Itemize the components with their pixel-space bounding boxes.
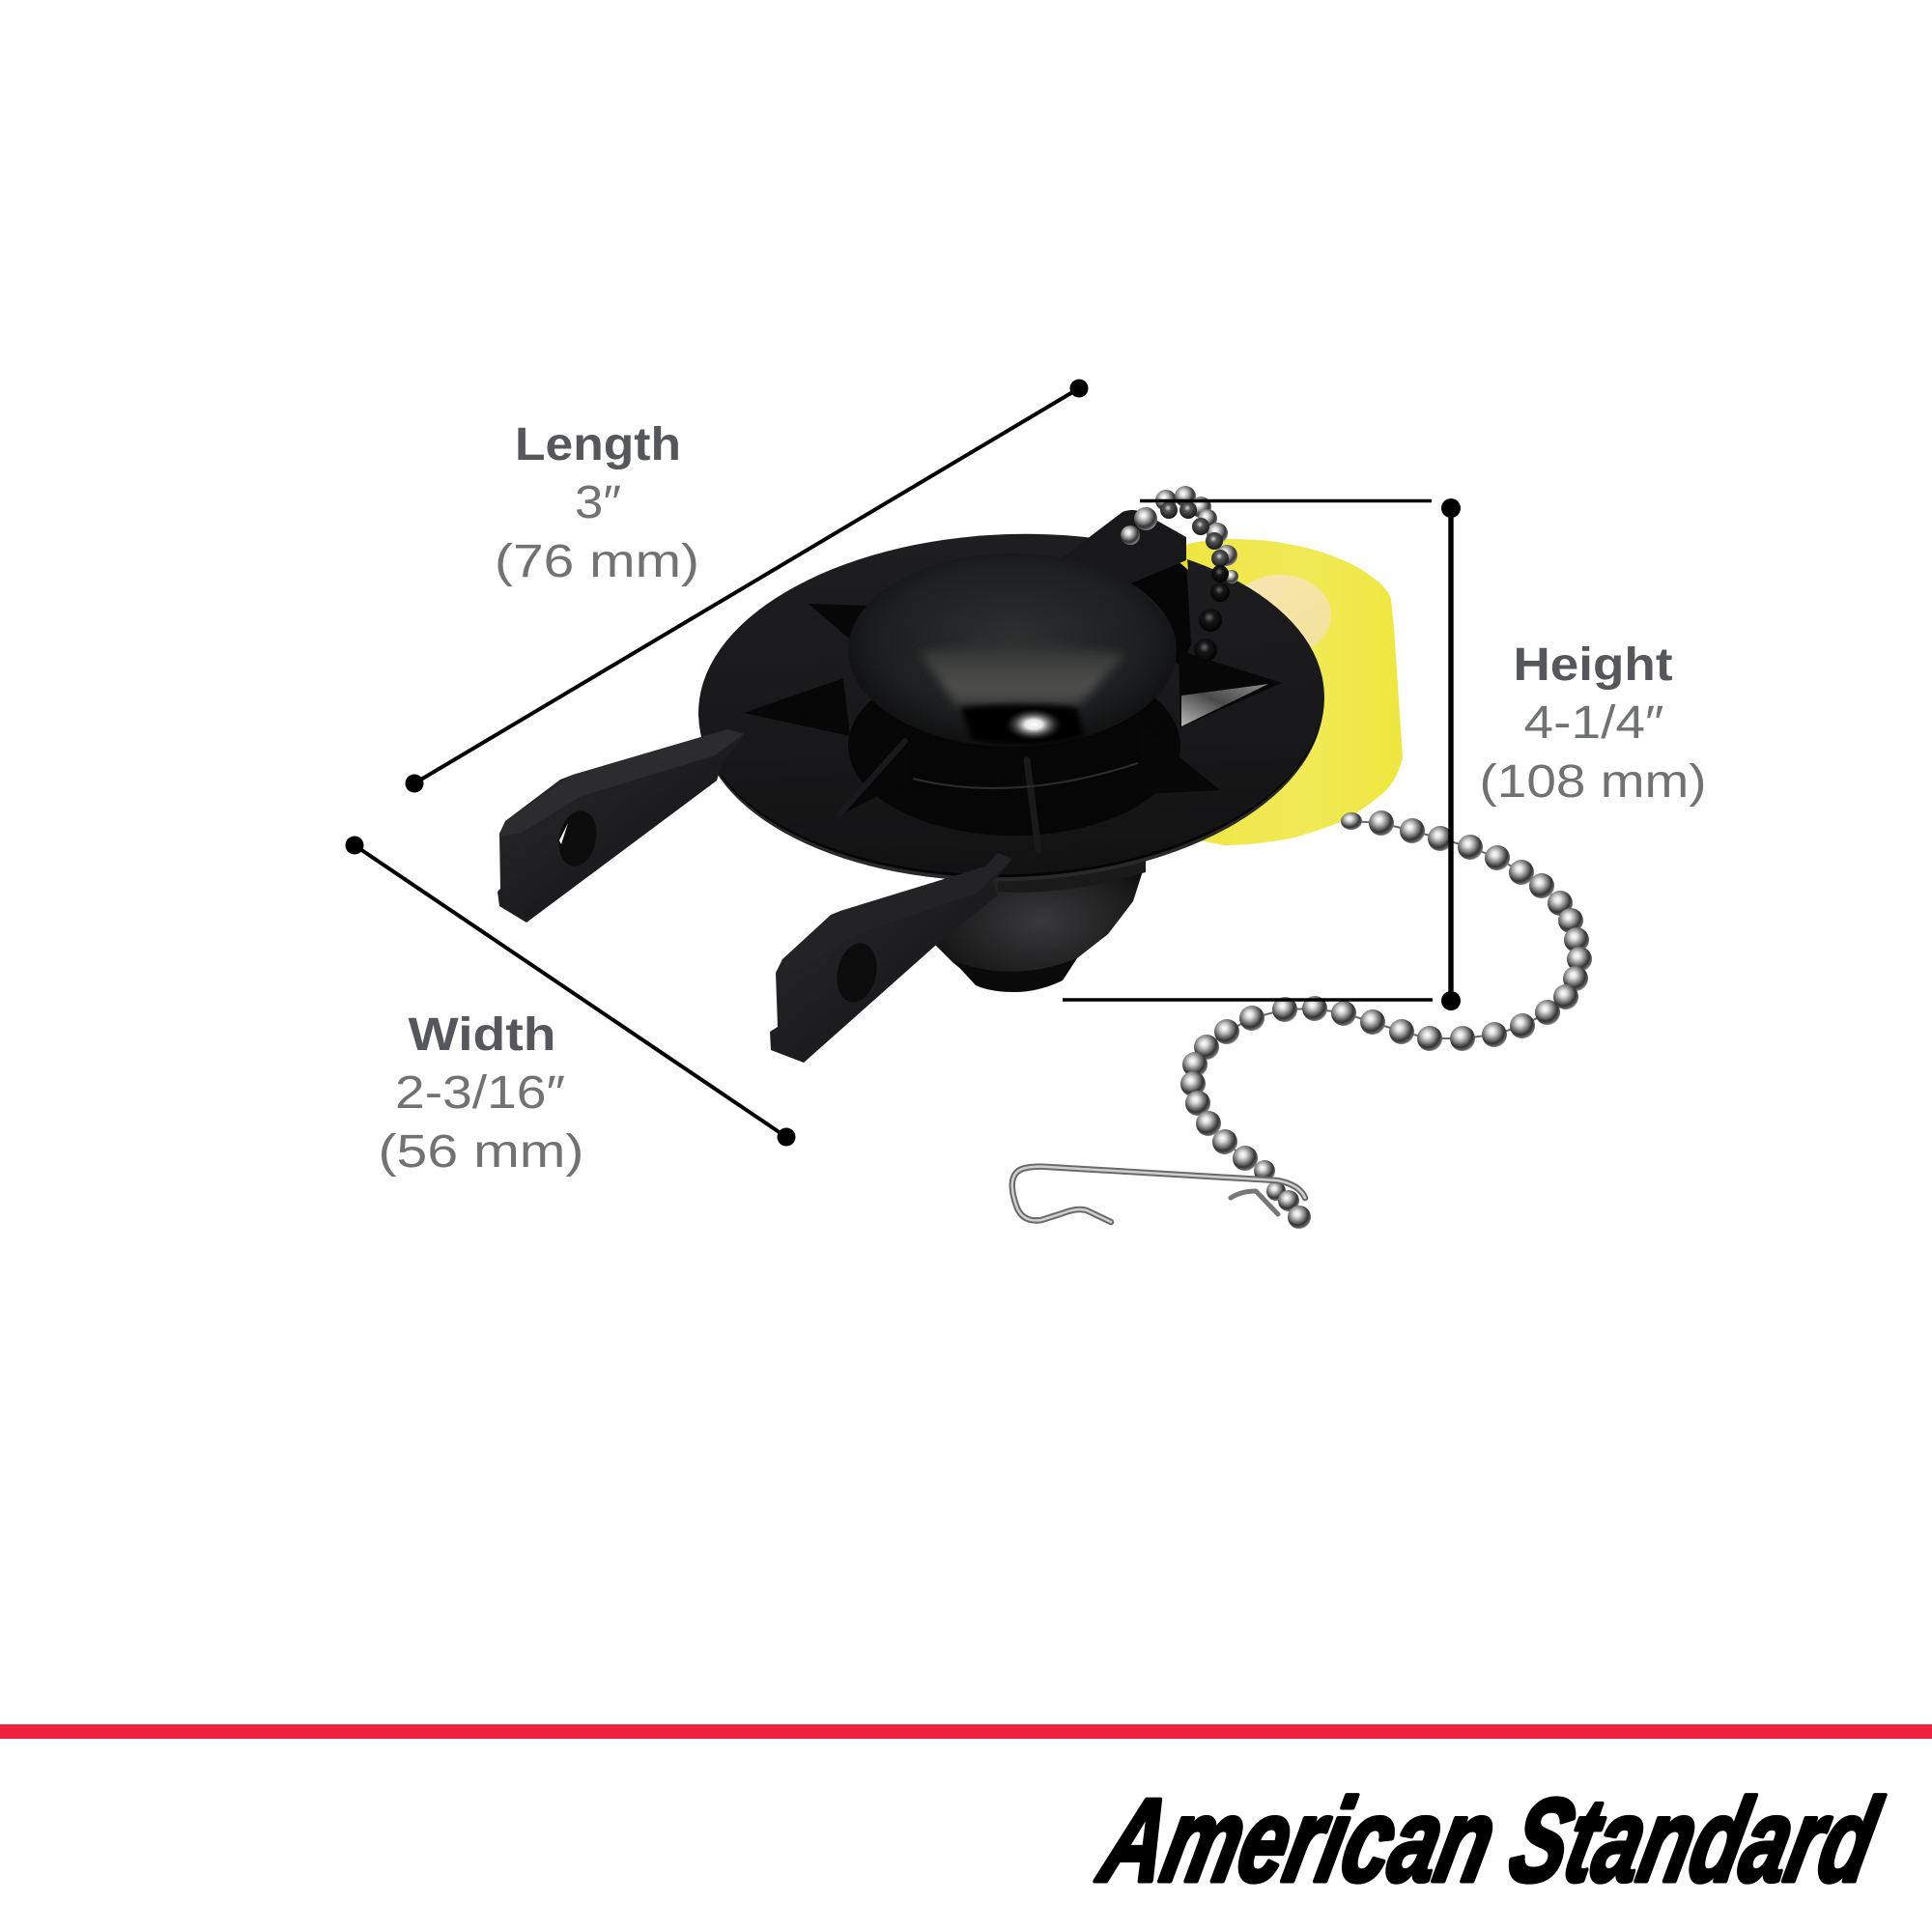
left arm sliver — [559, 823, 568, 844]
dimension label: Height — [1480, 639, 1706, 808]
yellow sliver — [1174, 546, 1188, 570]
rib reflection — [1181, 684, 1268, 726]
dimension label: Width: (56 mm) — [379, 1126, 583, 1178]
dimension label: Height: (108 mm) — [1480, 756, 1706, 808]
star ribs — [744, 604, 1282, 816]
dome — [848, 554, 1177, 747]
collar — [848, 656, 1180, 836]
cone collar band — [998, 860, 1146, 893]
disc rim — [694, 528, 1329, 892]
lower bead chain — [1180, 810, 1592, 1229]
height dimension bracket — [1063, 498, 1461, 1010]
upper chain — [1121, 486, 1238, 662]
thin ribs — [839, 741, 1038, 850]
dome highlight — [920, 645, 1125, 705]
dimension label: Width: Width — [408, 1009, 556, 1061]
dome gloss — [961, 705, 1084, 745]
front arm hole — [832, 940, 882, 1006]
red divider bar — [0, 1724, 1932, 1739]
tag hole — [1229, 575, 1331, 656]
dimension label: Length: Length — [515, 419, 681, 470]
top tab — [1063, 510, 1186, 599]
left arm ridge — [499, 729, 744, 837]
tab shadow — [1123, 560, 1191, 667]
disc — [693, 524, 1330, 885]
dimension label: Length: (76 mm) — [495, 536, 699, 587]
disc edge line — [693, 525, 1330, 888]
front clip arm — [770, 853, 1012, 1063]
product: toilet flapper — [497, 486, 1403, 1063]
dimension label: Height: 4-1/4″ — [1524, 697, 1663, 749]
dimension label: Length — [495, 419, 699, 587]
collar edges — [913, 763, 1138, 788]
yellow tag — [1150, 539, 1403, 845]
lower cone — [932, 850, 1150, 980]
brand logo: American — [1089, 1775, 1507, 1907]
dimension label: Width — [379, 1009, 583, 1178]
dimension label: Length: 3″ — [575, 477, 621, 528]
left arm hole — [554, 808, 602, 869]
width dimension line — [346, 837, 796, 1146]
length dimension line — [406, 379, 1088, 792]
cone lip — [953, 958, 1077, 992]
left clip arm — [497, 729, 744, 923]
front arm ridge — [776, 853, 1012, 976]
metal hook clip — [1012, 1167, 1305, 1222]
dome specular spot — [1005, 708, 1063, 741]
dimension label: Height: Height — [1513, 639, 1673, 691]
dimension label: Width: 2-3/16″ — [395, 1067, 565, 1119]
